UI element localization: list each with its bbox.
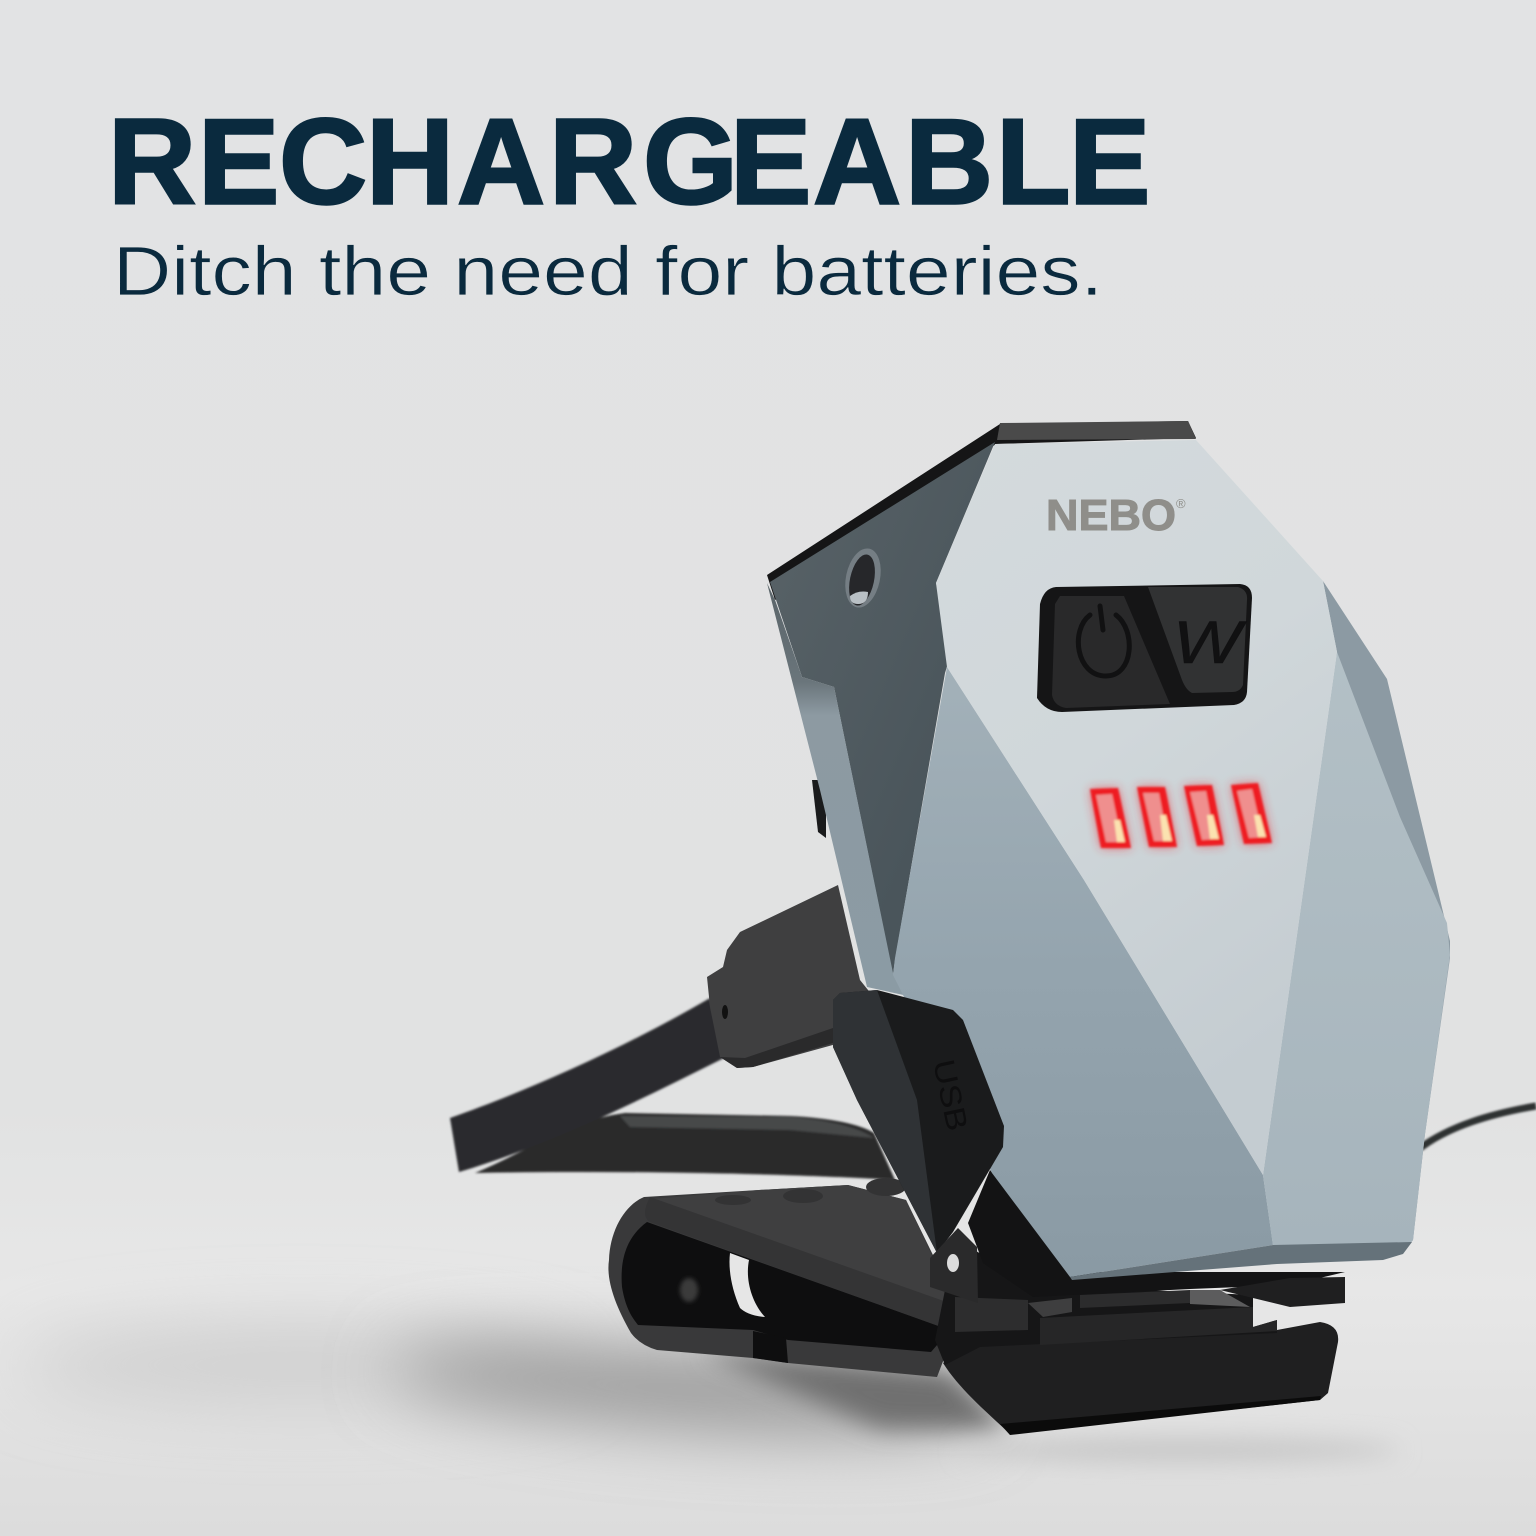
NEBO logo: NEBO <box>1046 491 1176 540</box>
LED 2 <box>1137 787 1177 847</box>
left light tab <box>1028 1298 1072 1317</box>
USB connector <box>707 885 880 1068</box>
upper block <box>1080 1290 1190 1308</box>
USB port flap <box>833 990 1004 1303</box>
clip outer arm <box>608 1185 955 1377</box>
mode key W glyph: W <box>1173 609 1247 676</box>
device body <box>767 421 1450 1280</box>
middle block <box>1040 1307 1277 1345</box>
left side facet <box>770 442 995 975</box>
title: RECHARGEABLE <box>108 94 1150 230</box>
flap right face <box>833 990 1004 1253</box>
rear mount wedge <box>968 1170 1345 1297</box>
flat cable loop <box>450 998 895 1180</box>
subtitle: Ditch the need for batteries. <box>113 232 1103 310</box>
hinge base block <box>955 1297 1028 1332</box>
LED 1 <box>1090 788 1131 848</box>
flap left face <box>833 990 937 1253</box>
side notch <box>812 780 826 838</box>
right light tab <box>1190 1290 1250 1307</box>
plate bumps <box>715 1178 906 1205</box>
LED 3 <box>1184 785 1224 846</box>
center facet <box>936 440 1337 1175</box>
rear cable run <box>475 1113 895 1180</box>
top black edge <box>767 421 1196 600</box>
mount blocks under the body <box>935 1170 1345 1365</box>
flap hinge <box>930 1228 978 1303</box>
right inner facet <box>1263 652 1450 1252</box>
clip top plate <box>652 1185 955 1307</box>
clip slot opening <box>729 1253 765 1317</box>
cavity highlight <box>680 1278 698 1302</box>
hinge pin <box>947 1254 959 1272</box>
lower-left facet <box>893 667 1273 1277</box>
front cable run <box>450 998 724 1172</box>
clip inner cavity <box>622 1222 950 1352</box>
clip foot <box>943 1322 1338 1435</box>
battery LED indicators <box>1090 783 1272 848</box>
control buttons <box>1037 584 1252 712</box>
right outer facet <box>1273 581 1450 1253</box>
button housing <box>1037 584 1252 712</box>
LED 4 <box>1231 783 1272 844</box>
right tab <box>1220 1277 1345 1307</box>
registered mark: ® <box>1176 496 1186 511</box>
clip bracket <box>608 1178 955 1377</box>
mount backing <box>935 1240 1277 1365</box>
thin cable at right <box>1420 1106 1536 1148</box>
left rim <box>767 583 908 996</box>
lower strap band <box>753 1331 788 1363</box>
power key <box>1052 596 1170 708</box>
plate front edge <box>645 1197 955 1332</box>
lanyard hole <box>840 545 886 611</box>
power icon <box>1078 606 1129 676</box>
bottom lip <box>1070 1242 1412 1280</box>
USB label: USB <box>926 1057 973 1134</box>
mode key <box>1148 587 1247 693</box>
